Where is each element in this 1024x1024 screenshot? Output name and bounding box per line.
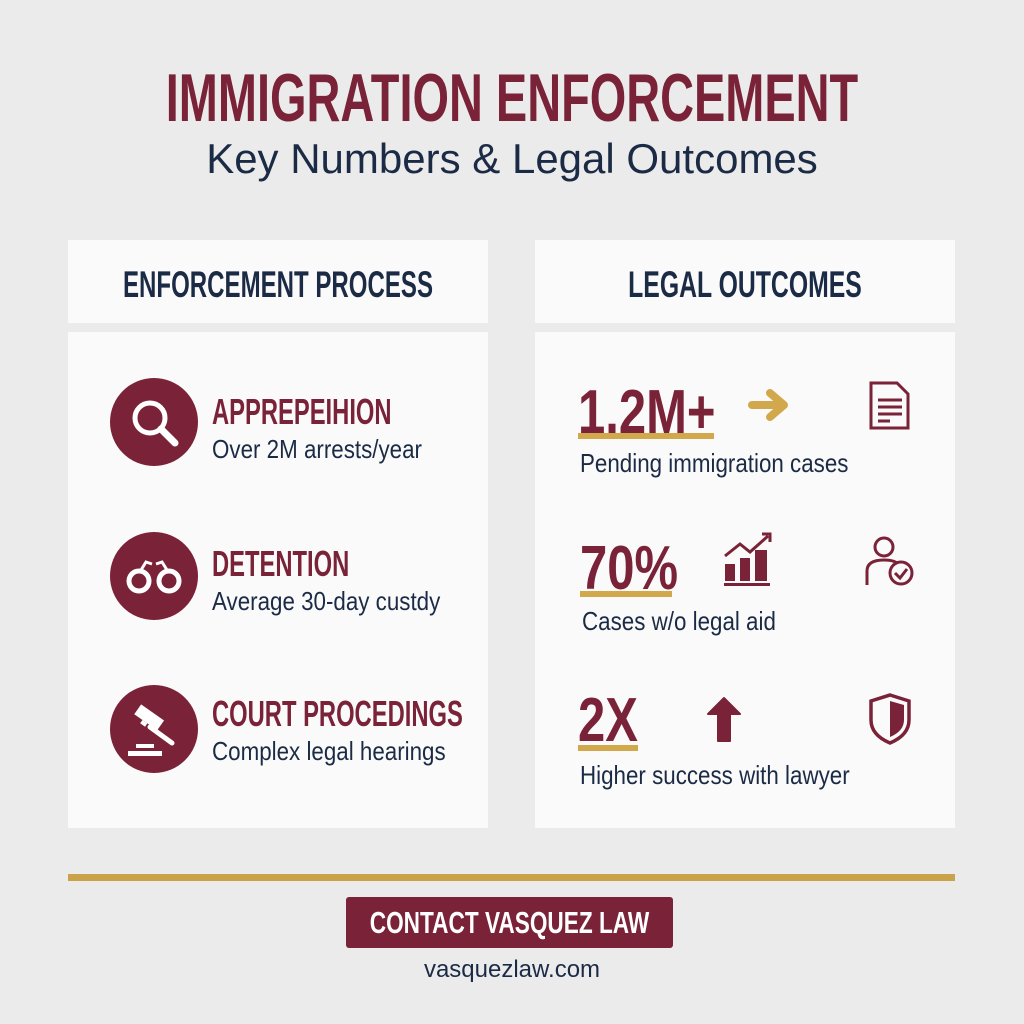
panel: legal outcomes: Pending immigration cases <box>580 448 848 478</box>
stat: 1.2M+: 1.2M+ <box>578 378 715 447</box>
icon: gold arrow <box>748 389 788 421</box>
icon: up arrow <box>707 697 741 742</box>
icon: shield <box>869 693 911 745</box>
icon: handcuffs <box>110 532 198 620</box>
url: vasquezlaw.com <box>424 956 600 983</box>
panel: legal outcomes <box>535 332 955 828</box>
button: contact: CONTACT VASQUEZ LAW <box>370 905 649 940</box>
item: apprehension: APPREPEIHION <box>212 391 392 432</box>
item: apprehension <box>212 391 422 464</box>
subtitle: Key Numbers & Legal Outcomes <box>206 135 818 182</box>
panel header: enforcement process: ENFORCEMENT PROCESS <box>123 264 433 305</box>
stat: 2X: 2X <box>578 686 638 755</box>
divider: gold line <box>68 874 955 881</box>
item: detention <box>212 543 440 616</box>
item: court proceedings: Complex legal hearings <box>212 736 446 766</box>
panel header: enforcement process <box>68 240 488 323</box>
icon: document <box>870 382 910 430</box>
icon: gavel <box>110 685 198 773</box>
panel: legal outcomes: Cases w/o legal aid <box>582 606 776 636</box>
panel header: legal outcomes <box>535 240 955 323</box>
item: apprehension: Over 2M arrests/year <box>212 434 422 464</box>
panel: enforcement process <box>68 332 488 828</box>
icon: magnifier <box>110 378 198 466</box>
stat: 70%: 70% <box>580 534 678 603</box>
icon: bar chart <box>724 532 772 586</box>
title: IMMIGRATION ENFORCEMENT <box>166 60 858 136</box>
item: detention: DETENTION <box>212 543 349 584</box>
item: court proceedings <box>212 693 463 766</box>
panel header: legal outcomes: LEGAL OUTCOMES <box>628 264 862 305</box>
panel: legal outcomes: Higher success with lawyer <box>580 760 850 790</box>
item: court proceedings: COURT PROCEDINGS <box>212 693 463 734</box>
button: contact <box>346 897 673 948</box>
icon: person with check <box>866 536 914 586</box>
item: detention: Average 30-day custdy <box>212 586 440 616</box>
